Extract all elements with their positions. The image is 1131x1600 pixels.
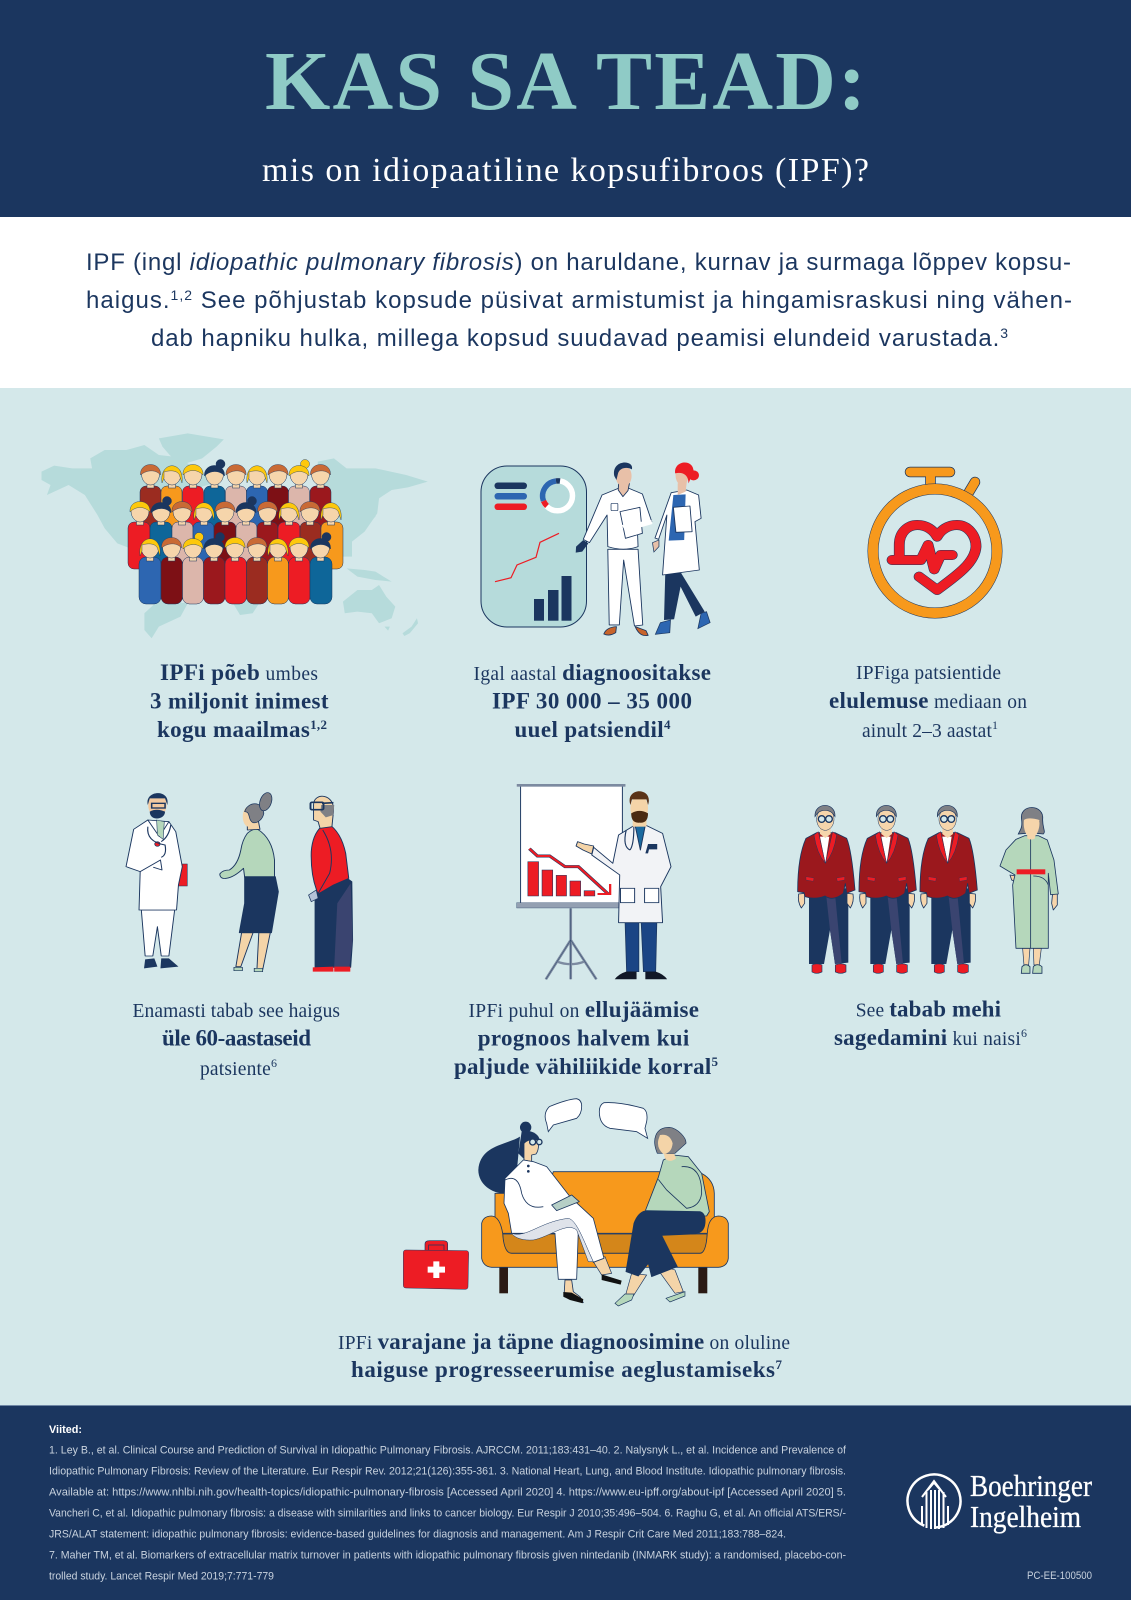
caption: median survival: IPFiga patsientide	[856, 663, 1001, 684]
doctor seated	[478, 1122, 622, 1303]
caption: poor prognosis: prognoos halvem kui	[478, 1026, 690, 1051]
icon: two doctors	[576, 462, 710, 636]
intro text panel: dab hapniku hulka, millega kopsud suudavad peamisi elundeid varustada.	[151, 325, 999, 352]
caption: men more often	[834, 997, 1027, 1050]
references	[49, 1424, 847, 1582]
caption: over 60: Enamasti tabab see haigus	[132, 1001, 340, 1022]
header banner	[0, 0, 1131, 217]
caption: over 60: 6	[271, 1056, 277, 1070]
doctor with red clipboard	[126, 793, 187, 968]
caption: 3 million: 1,2	[310, 717, 327, 732]
caption: diagnoses per year: Igal aastal diagnoositakse	[474, 660, 711, 685]
caption: poor prognosis	[454, 997, 718, 1079]
front row	[139, 532, 332, 604]
caption: early diagnosis: IPFi varajane ja täpne diagnoosimine on oluline	[338, 1329, 790, 1354]
caption: early diagnosis: 7	[776, 1357, 782, 1372]
presentation board	[517, 784, 625, 979]
subtitle: mis on idiopaatiline kopsufibroos (IPF)?	[262, 152, 869, 189]
sofa	[482, 1172, 728, 1293]
woman in green top	[220, 791, 278, 972]
caption: diagnoses per year	[474, 660, 711, 742]
title: KAS SA TEAD:	[265, 35, 866, 128]
caption: median survival	[829, 663, 1027, 742]
icon: consultation on sofa	[403, 1099, 728, 1306]
caption: diagnoses per year: IPF 30 000 – 35 000	[492, 688, 692, 714]
caption: over 60	[132, 1001, 340, 1080]
logo: Boehringer Ingelheim: Boehringer	[970, 1468, 1093, 1503]
falling bars	[528, 862, 595, 896]
doctor	[576, 791, 671, 979]
caption: median survival: elulemuse mediaan on	[829, 688, 1027, 713]
heart with ECG line	[892, 525, 976, 590]
references: 1. Ley B., et al. Clinical Course and Prediction of Survival in Idiopathic Pulmonary Fibrosis. AJRCCM. 2011;183:431–40. 2. Nalysnyk L., et al. Incidence and Prevalence of	[49, 1444, 847, 1456]
caption: poor prognosis: 5	[712, 1054, 718, 1069]
caption: men more often: 6	[1021, 1026, 1027, 1040]
first aid case	[403, 1241, 469, 1289]
references: Viited:	[49, 1424, 82, 1436]
older man in red sweater	[309, 796, 353, 972]
document code: PC-EE-100500	[1027, 1570, 1092, 1582]
references: Available at: https://www.nhlbi.nih.gov/health-topics/idiopathic-pulmonary-fibrosis [Accessed April 2020] 4. https://www.eu-ipff.org/about-ipf [Accessed April 2020] 5.	[49, 1487, 846, 1499]
icon: three men and one woman	[798, 805, 1058, 973]
back row	[140, 460, 331, 536]
menu bars	[494, 482, 527, 510]
man one	[798, 805, 855, 973]
intro text panel: IPF (ingl idiopathic pulmonary fibrosis) on haruldane, kurnav ja surmaga lõppev kopsu-	[86, 249, 1071, 276]
caption: early diagnosis: haiguse progresseerumise aeglustamiseks	[351, 1357, 775, 1382]
intro text panel: 3	[1000, 325, 1008, 341]
caption: diagnoses per year: 4	[664, 717, 671, 732]
caption: 3 million: IPFi põeb umbes	[160, 660, 318, 685]
icon: stopwatch with heart	[873, 472, 997, 613]
intro text panel: See põhjustab kopsude püsivat armistumist ja hingamisraskusi ning vähen-	[193, 287, 1072, 314]
intro text panel: haigus.	[86, 287, 170, 314]
references: 7. Maher TM, et al. Biomarkers of extracellular matrix turnover in patients with idiopathic pulmonary fibrosis given nintedanib (INMARK study): a randomised, placebo-con-	[49, 1549, 846, 1561]
caption: diagnoses per year: uuel patsiendil	[514, 717, 664, 742]
caption: men more often: sagedamini kui naisi	[834, 1025, 1021, 1050]
icon: world map	[42, 433, 428, 638]
references: trolled study. Lancet Respir Med 2019;7:771-779	[49, 1570, 274, 1582]
intro text panel: 1,2	[171, 287, 192, 303]
woman in green dress	[1000, 807, 1058, 973]
icon: doctor presenting falling chart	[517, 784, 671, 979]
caption: poor prognosis: paljude vähiliikide korral	[454, 1054, 711, 1079]
caption: 3 million: 3 miljonit inimest	[150, 688, 329, 714]
references: Idiopathic Pulmonary Fibrosis: Review of the Literature. Eur Respir Rev. 2012;21(126):355-361. 3. National Heart, Lung, and Blood Institute. Idiopathic pulmonary fibrosis.	[49, 1466, 846, 1478]
references: Vancheri C, et al. Idiopathic pulmonary fibrosis: a disease with similarities and links to cancer biology. Eur Respir J 2010;35:496–504. 6. Raghu G, et al. An official ATS/ERS/-	[49, 1508, 846, 1520]
intro text panel	[0, 217, 1131, 388]
caption: 3 million	[150, 660, 329, 742]
caption: median survival: 1	[992, 718, 998, 732]
speech bubbles	[545, 1099, 648, 1138]
references: JRS/ALAT statement: idiopathic pulmonary fibrosis: evidence-based guidelines for diagnosis and management. Am J Respir Crit Care Med 2011;183:788–824.	[49, 1528, 786, 1540]
caption: 3 million: kogu maailmas	[157, 717, 310, 742]
female doctor	[652, 462, 710, 634]
caption: men more often: See tabab mehi	[856, 997, 1002, 1022]
patient seated	[615, 1127, 709, 1306]
footer panel	[0, 1405, 1131, 1600]
man three	[920, 805, 977, 973]
icon: doctor and older patients	[126, 791, 353, 972]
caption: over 60: patsiente	[200, 1059, 271, 1080]
male doctor	[576, 463, 652, 636]
caption: median survival: ainult 2–3 aastat	[862, 721, 992, 742]
icon: crowd of people	[128, 460, 343, 604]
falling arrow	[529, 849, 610, 894]
icon: dashboard panel	[481, 466, 586, 627]
caption: poor prognosis: IPFi puhul on ellujäämise	[468, 997, 699, 1022]
donut chart	[542, 481, 572, 511]
man two	[859, 805, 916, 973]
bar chart	[534, 576, 572, 621]
logo: Boehringer Ingelheim	[898, 1465, 1093, 1537]
caption: early diagnosis	[338, 1329, 790, 1382]
middle row	[128, 496, 343, 569]
caption: over 60: üle 60-aastaseid	[162, 1026, 311, 1051]
line chart	[495, 533, 559, 582]
logo: Boehringer Ingelheim: Ingelheim	[970, 1499, 1081, 1534]
